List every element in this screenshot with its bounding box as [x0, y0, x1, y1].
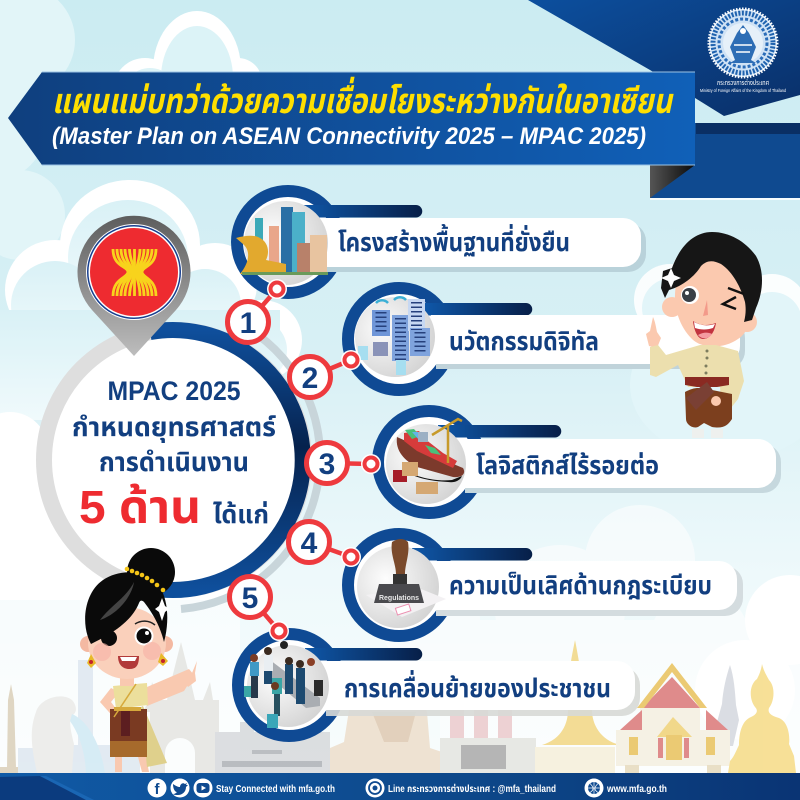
main circle text: [72, 376, 276, 533]
label pill: [323, 223, 646, 272]
label: ความเป็นเลิศด้านกฎระเบียบ: [449, 570, 712, 600]
item 3: seamless logistics: [378, 411, 781, 513]
icon: globe: [584, 778, 604, 798]
header bar: [412, 548, 532, 560]
label pill: [436, 320, 745, 369]
label: โลจิสติกส์ไร้รอยต่อ: [476, 450, 659, 480]
item 2: digital innovation: [348, 288, 745, 390]
label pill: [326, 667, 640, 716]
monument: [7, 684, 16, 768]
label: การเคลื่อนย้ายของประชาชน: [344, 670, 611, 703]
icon: cargo ship: [386, 419, 466, 504]
number badge 5: 5: [242, 582, 258, 615]
main circle text: MPAC 2025: [108, 376, 240, 406]
number badge 2: 2: [302, 362, 318, 395]
stone face: [330, 676, 445, 773]
ministry name: กระทรวงการต่างประเทศ: [717, 78, 769, 87]
footer bar: [0, 773, 800, 800]
main circle panel: [44, 330, 320, 609]
icon: travellers at check-in: [244, 641, 329, 728]
mausoleum: [440, 738, 536, 773]
number badge 3: 3: [319, 448, 335, 481]
ASEAN emblem: [113, 249, 156, 296]
label: โครงสร้างพื้นฐานที่ยั่งยืน: [338, 224, 570, 257]
victory gate: [143, 642, 219, 773]
thai temple: [616, 663, 730, 773]
ring: [378, 411, 480, 513]
main circle text: กำหนดยุทธศาสตร์: [72, 412, 276, 443]
icon: data centre: [355, 297, 435, 377]
ring: [237, 191, 339, 293]
number badge 4: [288, 522, 361, 567]
ring: [348, 534, 450, 636]
item 1: sustainable infrastructure: [236, 191, 646, 293]
subtitle: (Master Plan on ASEAN Connectivity 2025 – MPAC 2025): [52, 123, 646, 150]
title banner: [8, 72, 695, 165]
label: นวัตกรรมดิจิทัล: [449, 326, 599, 356]
number badge 2: [290, 350, 361, 398]
icon: line: [366, 778, 384, 798]
number badge 1: [228, 279, 287, 342]
ministry seal: [709, 9, 777, 77]
main circle text: การดำเนินงาน: [99, 447, 249, 477]
icon: twitter: [170, 778, 190, 798]
line caption: Line กระทรวงการต่างประเทศ : @mfa_thailand: [388, 782, 556, 795]
glass towers: [18, 660, 140, 773]
item 4: regulatory excellence: [348, 534, 743, 636]
icon: regulations stamp: [357, 539, 446, 628]
number badge 1: 1: [240, 307, 256, 340]
title: แผนแม่บทว่าด้วยความเชื่อมโยงระหว่างกันในอาเซียน: [52, 76, 674, 121]
skyline landmarks: [0, 640, 796, 773]
website caption: www.mfa.go.th: [606, 784, 667, 795]
icon: regulations stamp: Regulations: [379, 595, 419, 602]
icon: youtube: [194, 778, 212, 798]
social caption: Stay Connected with mfa.go.th: [216, 784, 335, 795]
label pill: [436, 566, 743, 616]
ministry name: [700, 78, 786, 93]
golden stupa: [571, 640, 579, 662]
header bar: [305, 648, 422, 660]
icon: facebook: f: [154, 781, 160, 798]
ring: [238, 634, 340, 736]
main circle text: 5 ด้าน: [79, 481, 201, 533]
number badge 5: [230, 576, 289, 641]
merlion: [32, 696, 76, 773]
ring: [348, 288, 450, 390]
item 5: people mobility: [238, 634, 640, 736]
top-right navy corner panel: [528, 0, 800, 200]
grey palace: [215, 722, 330, 773]
character: man in Thai costume: [646, 232, 762, 438]
header bar: [425, 303, 532, 316]
spire: [717, 665, 739, 746]
header bar: [438, 425, 561, 438]
main circle text: ได้แก่: [213, 499, 269, 529]
number badge 3: [306, 442, 381, 484]
icon: city skyline: [236, 201, 328, 285]
label pill: [465, 444, 781, 493]
character: woman in Thai dress: [80, 548, 197, 772]
number badge 4: 4: [301, 527, 318, 560]
ASEAN location pin: [77, 216, 190, 356]
buddha statue: [728, 664, 796, 773]
icon: facebook: [148, 778, 166, 798]
header bar: [302, 205, 422, 218]
